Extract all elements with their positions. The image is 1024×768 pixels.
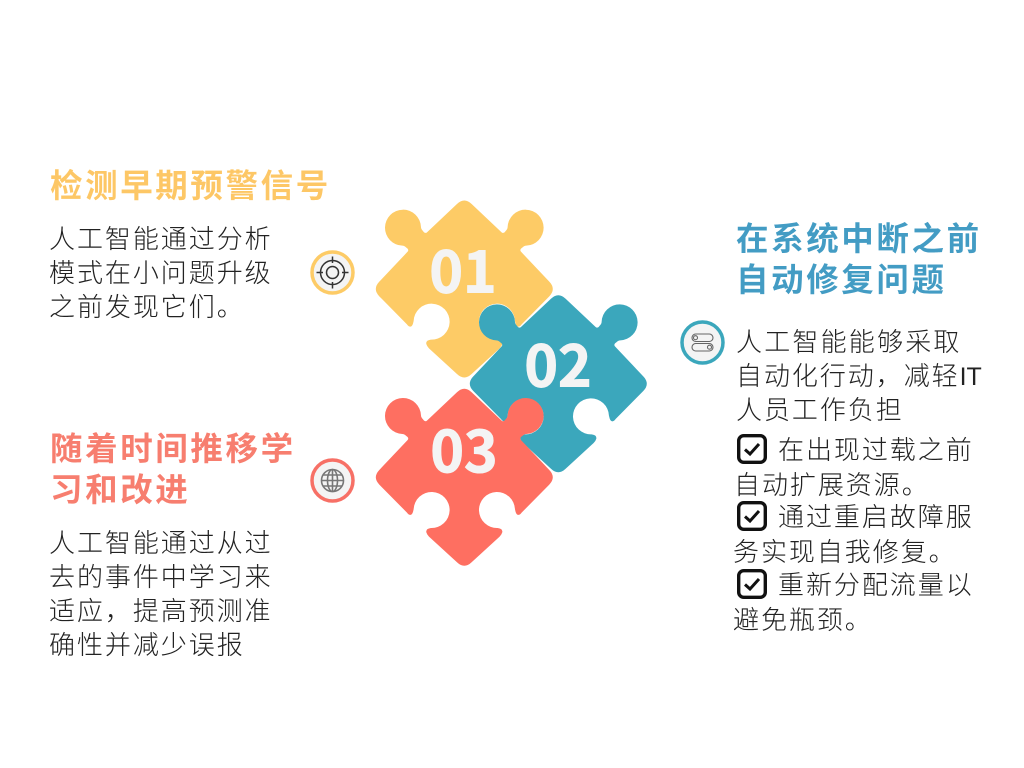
- text: learning body: 人工智能通过从过: [49, 528, 273, 558]
- heading: learning: 随着时间推移学: [50, 423, 296, 470]
- icon: globe: [310, 458, 355, 503]
- text: learning body: 确性并减少误报: [49, 630, 245, 660]
- checklist item 3: 避免瓶颈。: [733, 604, 873, 634]
- puzzle piece 02: [470, 295, 647, 472]
- checklist item 1: [734, 434, 974, 500]
- text: auto remediation body: 自动化行动，减轻IT: [736, 361, 982, 391]
- puzzle piece 02: 02: [524, 322, 592, 404]
- text: auto remediation body: [736, 327, 982, 425]
- heading: early warning: 检测早期预警信号: [50, 160, 331, 207]
- puzzle piece 03: 03: [430, 407, 498, 489]
- heading: auto remediation: [736, 213, 982, 301]
- checklist item 3: 重新分配流量以: [778, 570, 974, 600]
- icon: checkbox: [737, 434, 767, 464]
- icon: toggle switches: [680, 320, 725, 365]
- checklist item 2: 通过重启故障服: [778, 502, 974, 532]
- puzzle piece 03: [376, 389, 553, 566]
- text: learning body: [49, 528, 273, 660]
- text: early warning body: [49, 224, 273, 322]
- text: early warning body: 之前发现它们。: [49, 292, 245, 322]
- text: learning body: 适应，提高预测准: [49, 596, 273, 626]
- checklist item 3: [733, 569, 974, 634]
- checklist item 1: 在出现过载之前: [778, 435, 974, 465]
- text: early warning body: 人工智能通过分析: [49, 224, 273, 254]
- heading: auto remediation: 在系统中断之前: [736, 213, 982, 260]
- text: early warning body: 模式在小问题升级: [49, 258, 273, 288]
- puzzle piece 01: 01: [429, 228, 497, 310]
- heading: auto remediation: 自动修复问题: [736, 254, 947, 301]
- text: auto remediation body: 人工智能能够采取: [736, 327, 962, 357]
- puzzle piece 01: [376, 201, 553, 377]
- heading: learning: 习和改进: [50, 464, 190, 511]
- text: learning body: 去的事件中学习来: [49, 562, 273, 592]
- icon: checkbox: [737, 501, 767, 531]
- text: auto remediation body: 人员工作负担: [736, 395, 904, 425]
- checklist item 1: 自动扩展资源。: [734, 470, 930, 500]
- icon: checkbox: [737, 569, 767, 599]
- heading: learning: [50, 423, 296, 511]
- icon: target: [310, 250, 355, 295]
- checklist item 2: [733, 501, 974, 566]
- checklist item 2: 务实现自我修复。: [733, 536, 957, 566]
